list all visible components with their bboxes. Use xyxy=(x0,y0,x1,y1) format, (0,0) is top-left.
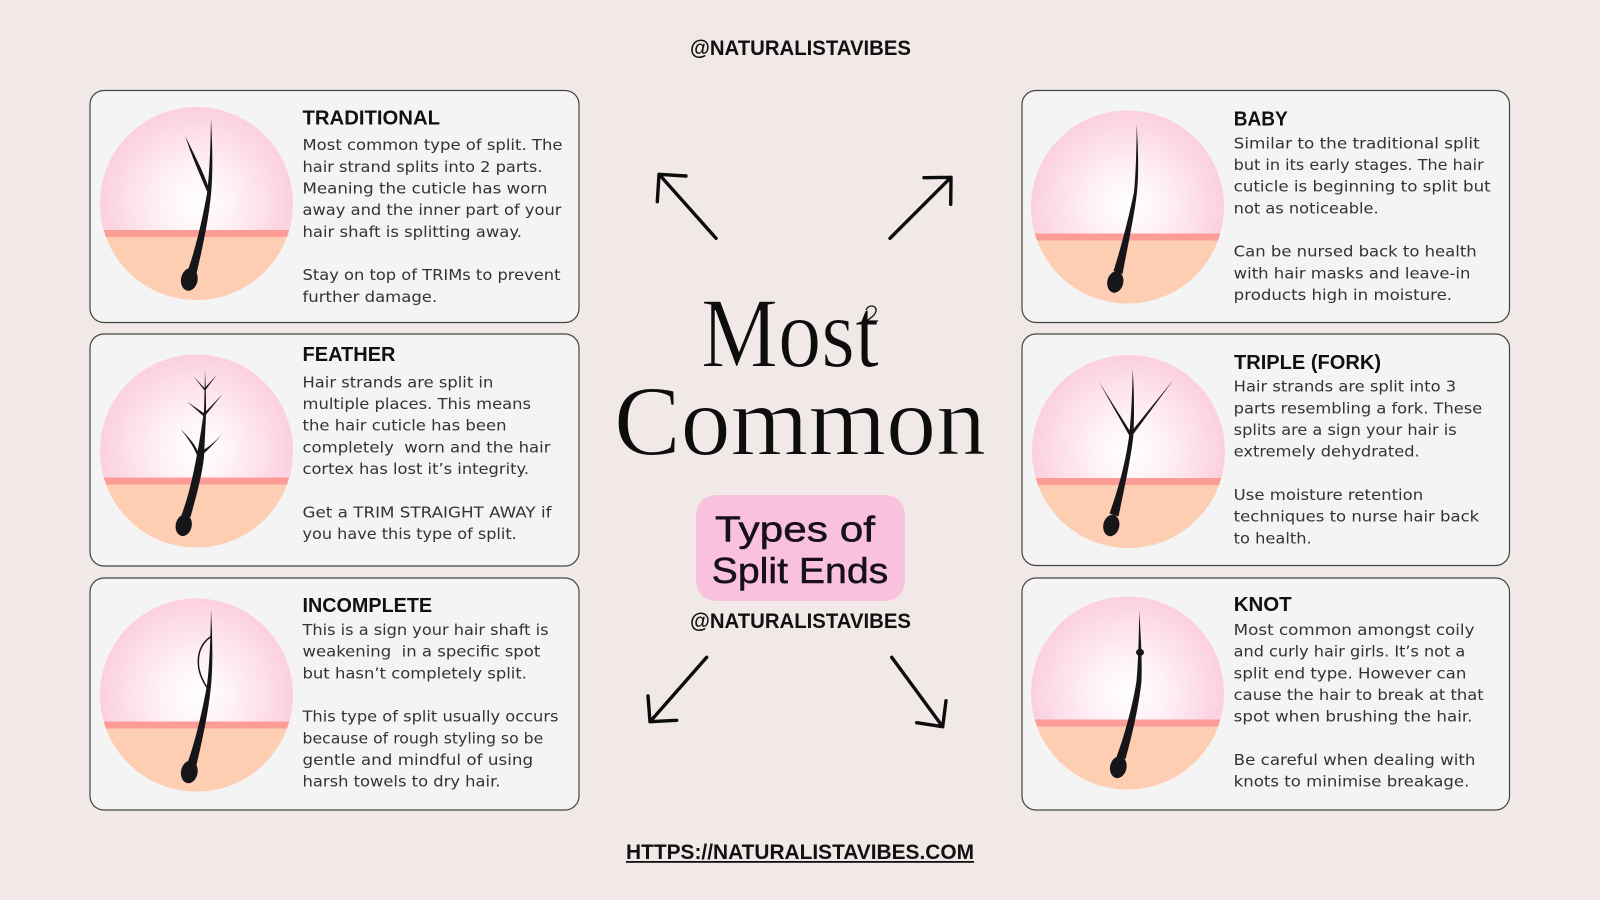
text: feather: Hair strands are split in xyxy=(302,373,493,391)
heading: incomplete: INCOMPLETE xyxy=(302,594,432,617)
heading: knot: KNOT xyxy=(1234,593,1292,616)
text: incomplete: This type of split usually occurs xyxy=(301,708,559,726)
text: knot: knots to minimise breakage. xyxy=(1234,773,1469,791)
icon: incomplete split hair xyxy=(100,598,293,792)
panel: baby xyxy=(1022,90,1510,322)
middle handle: @NATURALISTAVIBES xyxy=(690,610,911,633)
text: feather: you have this type of split. xyxy=(302,525,517,543)
arrow: bottom left xyxy=(648,657,707,722)
text: triple fork: extremely dehydrated. xyxy=(1234,443,1420,461)
text: triple fork: to health. xyxy=(1234,529,1312,547)
text: feather: cortex has lost it’s integrity. xyxy=(302,460,529,478)
text: incomplete: This is a sign your hair shaft is xyxy=(301,621,549,639)
text: triple fork: parts resembling a fork. These xyxy=(1234,399,1482,417)
top handle: @NATURALISTAVIBES xyxy=(690,37,911,60)
icon: traditional split hair xyxy=(100,107,293,300)
heading: feather: FEATHER xyxy=(302,343,396,366)
text: knot: spot when brushing the hair. xyxy=(1234,708,1472,726)
icon: baby split hair xyxy=(1031,110,1224,304)
text: feather xyxy=(302,373,552,543)
text: incomplete: because of rough styling so be xyxy=(302,729,543,747)
text: triple fork: Use moisture retention xyxy=(1234,486,1423,504)
icon: feather split hair xyxy=(100,354,293,548)
arrow: top left xyxy=(657,174,716,238)
text: traditional: Meaning the cuticle has worn xyxy=(302,180,548,198)
text: baby: Similar to the traditional split xyxy=(1234,135,1480,153)
text: triple fork xyxy=(1234,378,1482,547)
text: knot: Be careful when dealing with xyxy=(1234,751,1476,769)
text: traditional: hair shaft is splitting away. xyxy=(302,223,522,241)
text: traditional: Most common type of split. The xyxy=(302,136,562,154)
subtitle badge: Split Ends xyxy=(712,550,888,591)
text: triple fork: techniques to nurse hair back xyxy=(1234,508,1480,526)
text: feather: multiple places. This means xyxy=(302,395,531,413)
title xyxy=(614,278,986,476)
text: baby xyxy=(1234,135,1491,304)
text: baby: Can be nursed back to health xyxy=(1234,243,1477,261)
text: feather: the hair cuticle has been xyxy=(302,417,506,435)
panel: incomplete xyxy=(90,578,579,810)
arrow: top right xyxy=(890,177,951,238)
panel: traditional xyxy=(90,90,579,322)
text: incomplete: but hasn’t completely split. xyxy=(302,664,527,682)
text: baby: cuticle is beginning to split but xyxy=(1234,178,1491,196)
footer link: HTTPS://NATURALISTAVIBES.COM xyxy=(626,841,974,864)
text: traditional: further damage. xyxy=(302,288,437,306)
subtitle badge xyxy=(696,495,905,601)
text: baby: not as noticeable. xyxy=(1234,199,1379,217)
text: feather: completely worn and the hair xyxy=(302,438,551,456)
heading: baby: BABY xyxy=(1234,108,1288,130)
heading: traditional: TRADITIONAL xyxy=(302,107,440,130)
title: Common xyxy=(614,365,986,476)
text: traditional: away and the inner part of your xyxy=(302,201,562,219)
text: knot: Most common amongst coily xyxy=(1234,621,1475,639)
text: traditional: Stay on top of TRIMs to prevent xyxy=(302,266,561,284)
panel: feather xyxy=(90,334,579,566)
icon: triple fork split hair xyxy=(1032,355,1225,548)
text: knot: and curly hair girls. It’s not a xyxy=(1234,643,1465,661)
arrow: bottom right xyxy=(892,657,946,727)
text: incomplete xyxy=(301,621,559,791)
panel: knot xyxy=(1022,578,1510,810)
text: baby: products high in moisture. xyxy=(1234,286,1452,304)
text: traditional xyxy=(302,136,562,306)
text: incomplete: weakening in a specific spot xyxy=(302,643,540,661)
text: triple fork: Hair strands are split into 3 xyxy=(1234,378,1456,396)
icon: knot hair xyxy=(1031,596,1224,790)
text: incomplete: gentle and mindful of using xyxy=(302,751,533,769)
heading: triple fork: TRIPLE (FORK) xyxy=(1234,351,1381,374)
text: baby: but in its early stages. The hair xyxy=(1234,156,1485,174)
text: knot: split end type. However can xyxy=(1234,664,1466,682)
text: knot: cause the hair to break at that xyxy=(1234,686,1484,704)
panel: triple fork xyxy=(1022,334,1510,566)
text: traditional: hair strand splits into 2 parts. xyxy=(302,158,542,176)
subtitle badge: Types of xyxy=(715,508,876,550)
text: feather: Get a TRIM STRAIGHT AWAY if xyxy=(302,503,552,521)
text: knot xyxy=(1234,621,1484,791)
title: Most xyxy=(701,278,879,389)
text: triple fork: splits are a sign your hair is xyxy=(1234,421,1457,439)
text: incomplete: harsh towels to dry hair. xyxy=(302,773,500,791)
text: baby: with hair masks and leave-in xyxy=(1234,264,1470,282)
